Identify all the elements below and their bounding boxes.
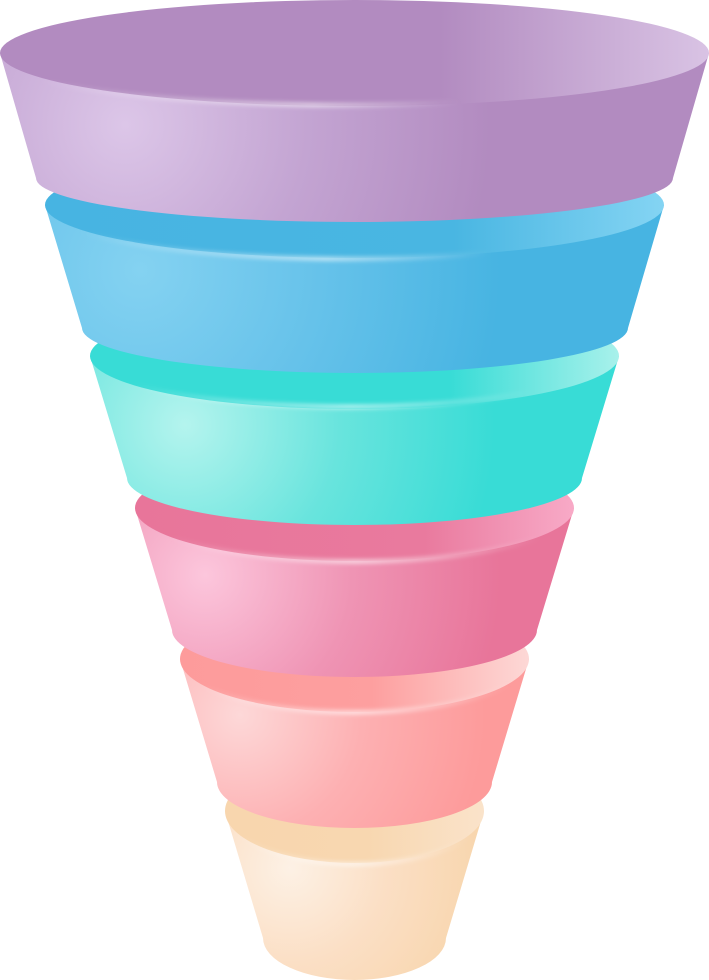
funnel tier 6: peach bbox=[225, 759, 484, 980]
tier 3 top rim bbox=[90, 303, 619, 409]
tier 2 top rim bbox=[45, 152, 664, 258]
tier 6 body bbox=[225, 811, 484, 980]
funnel tier 2: blue bbox=[45, 152, 664, 373]
tier 5 top rim bbox=[180, 606, 529, 712]
tier 4 body bbox=[135, 508, 574, 677]
tier 1 top rim bbox=[0, 0, 709, 106]
tier 1 rim highlight bbox=[40, 80, 460, 105]
tier 3 rim highlight bbox=[130, 384, 530, 407]
funnel tier 1: purple bbox=[0, 0, 709, 222]
funnel tier 3: teal bbox=[90, 303, 619, 525]
tier 3 body bbox=[90, 356, 619, 525]
funnel tier 4: pink bbox=[135, 455, 574, 677]
tier 4 rim highlight bbox=[170, 537, 540, 561]
tier 6 rim highlight bbox=[240, 836, 470, 864]
funnel tier 5: salmon bbox=[180, 606, 529, 828]
tier 5 body bbox=[180, 659, 529, 828]
tier 5 rim highlight bbox=[200, 684, 509, 712]
tier 2 rim highlight bbox=[80, 232, 490, 259]
tier 4 top rim bbox=[135, 455, 574, 561]
tier 2 body bbox=[45, 205, 664, 373]
tier 1 body bbox=[0, 53, 709, 222]
tier 6 top rim bbox=[225, 759, 484, 863]
